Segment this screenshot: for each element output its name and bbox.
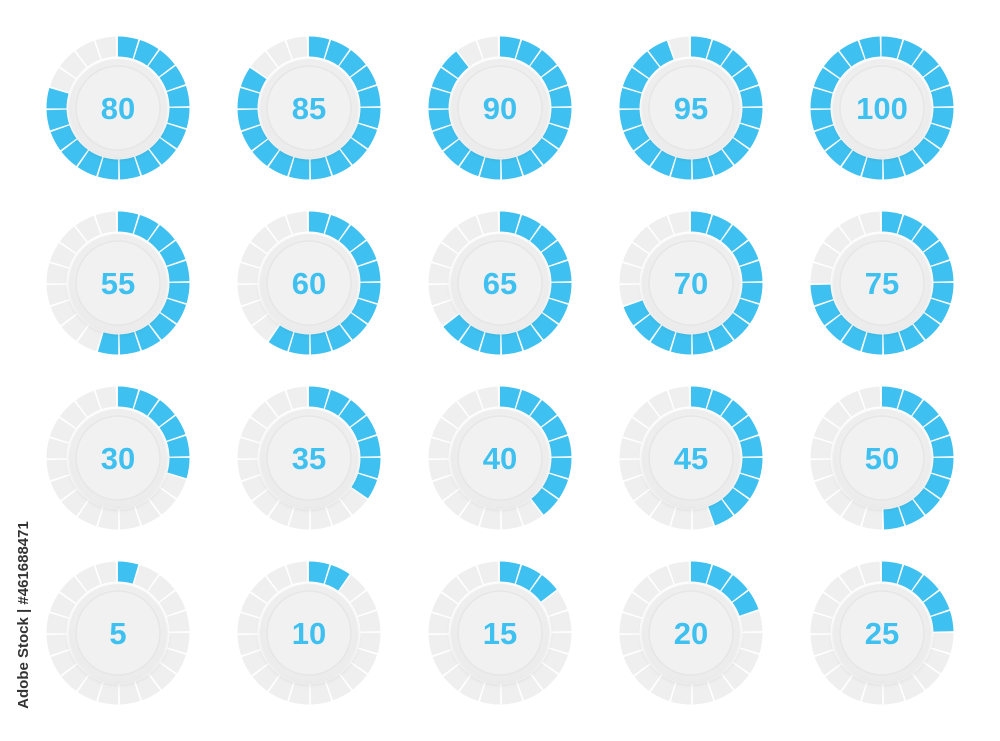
watermark text: Adobe Stock id: Adobe Stock | #461688471 (15, 521, 32, 709)
gauge 15: 15 (483, 616, 517, 651)
gauge 5 (56, 572, 180, 694)
gauge 45 (630, 396, 752, 520)
gauge 50 (820, 396, 944, 520)
gauge 20: 20 (674, 616, 708, 651)
gauge 10 (248, 572, 370, 694)
gauge 80: 80 (101, 91, 135, 126)
gauge 60: 60 (292, 266, 326, 301)
gauge 50: 50 (865, 441, 899, 476)
gauge 20 (630, 572, 752, 694)
gauge 70: 70 (674, 266, 708, 301)
gauge 25: 25 (865, 616, 899, 651)
gauge 85 (248, 46, 370, 170)
gauge 65 (438, 222, 562, 344)
gauge 100 (820, 46, 944, 170)
gauge 90: 90 (483, 91, 517, 126)
gauge 30 (56, 396, 180, 520)
gauge 65: 65 (483, 266, 517, 301)
gauge 35 (248, 396, 370, 520)
gauge 45: 45 (674, 441, 708, 476)
gauge 85: 85 (292, 91, 326, 126)
gauge 55: 55 (101, 266, 135, 301)
gauge 70 (630, 222, 752, 344)
gauge 5: 5 (109, 616, 127, 651)
gauge 100: 100 (856, 91, 908, 126)
gauge 90 (438, 46, 562, 170)
gauge 55 (56, 222, 180, 344)
gauge 40 (438, 396, 562, 520)
gauge 80 (56, 46, 180, 170)
gauge 40: 40 (483, 441, 517, 476)
gauge 10: 10 (292, 616, 326, 651)
gauge 95 (630, 46, 752, 170)
gauge 75: 75 (865, 266, 899, 301)
gauge 25 (820, 572, 944, 694)
gauge 75 (820, 222, 944, 344)
gauge 35: 35 (292, 441, 326, 476)
gauge 15 (438, 572, 562, 694)
gauge 60 (248, 222, 370, 344)
gauge 30: 30 (101, 441, 135, 476)
gauge 95: 95 (674, 91, 708, 126)
